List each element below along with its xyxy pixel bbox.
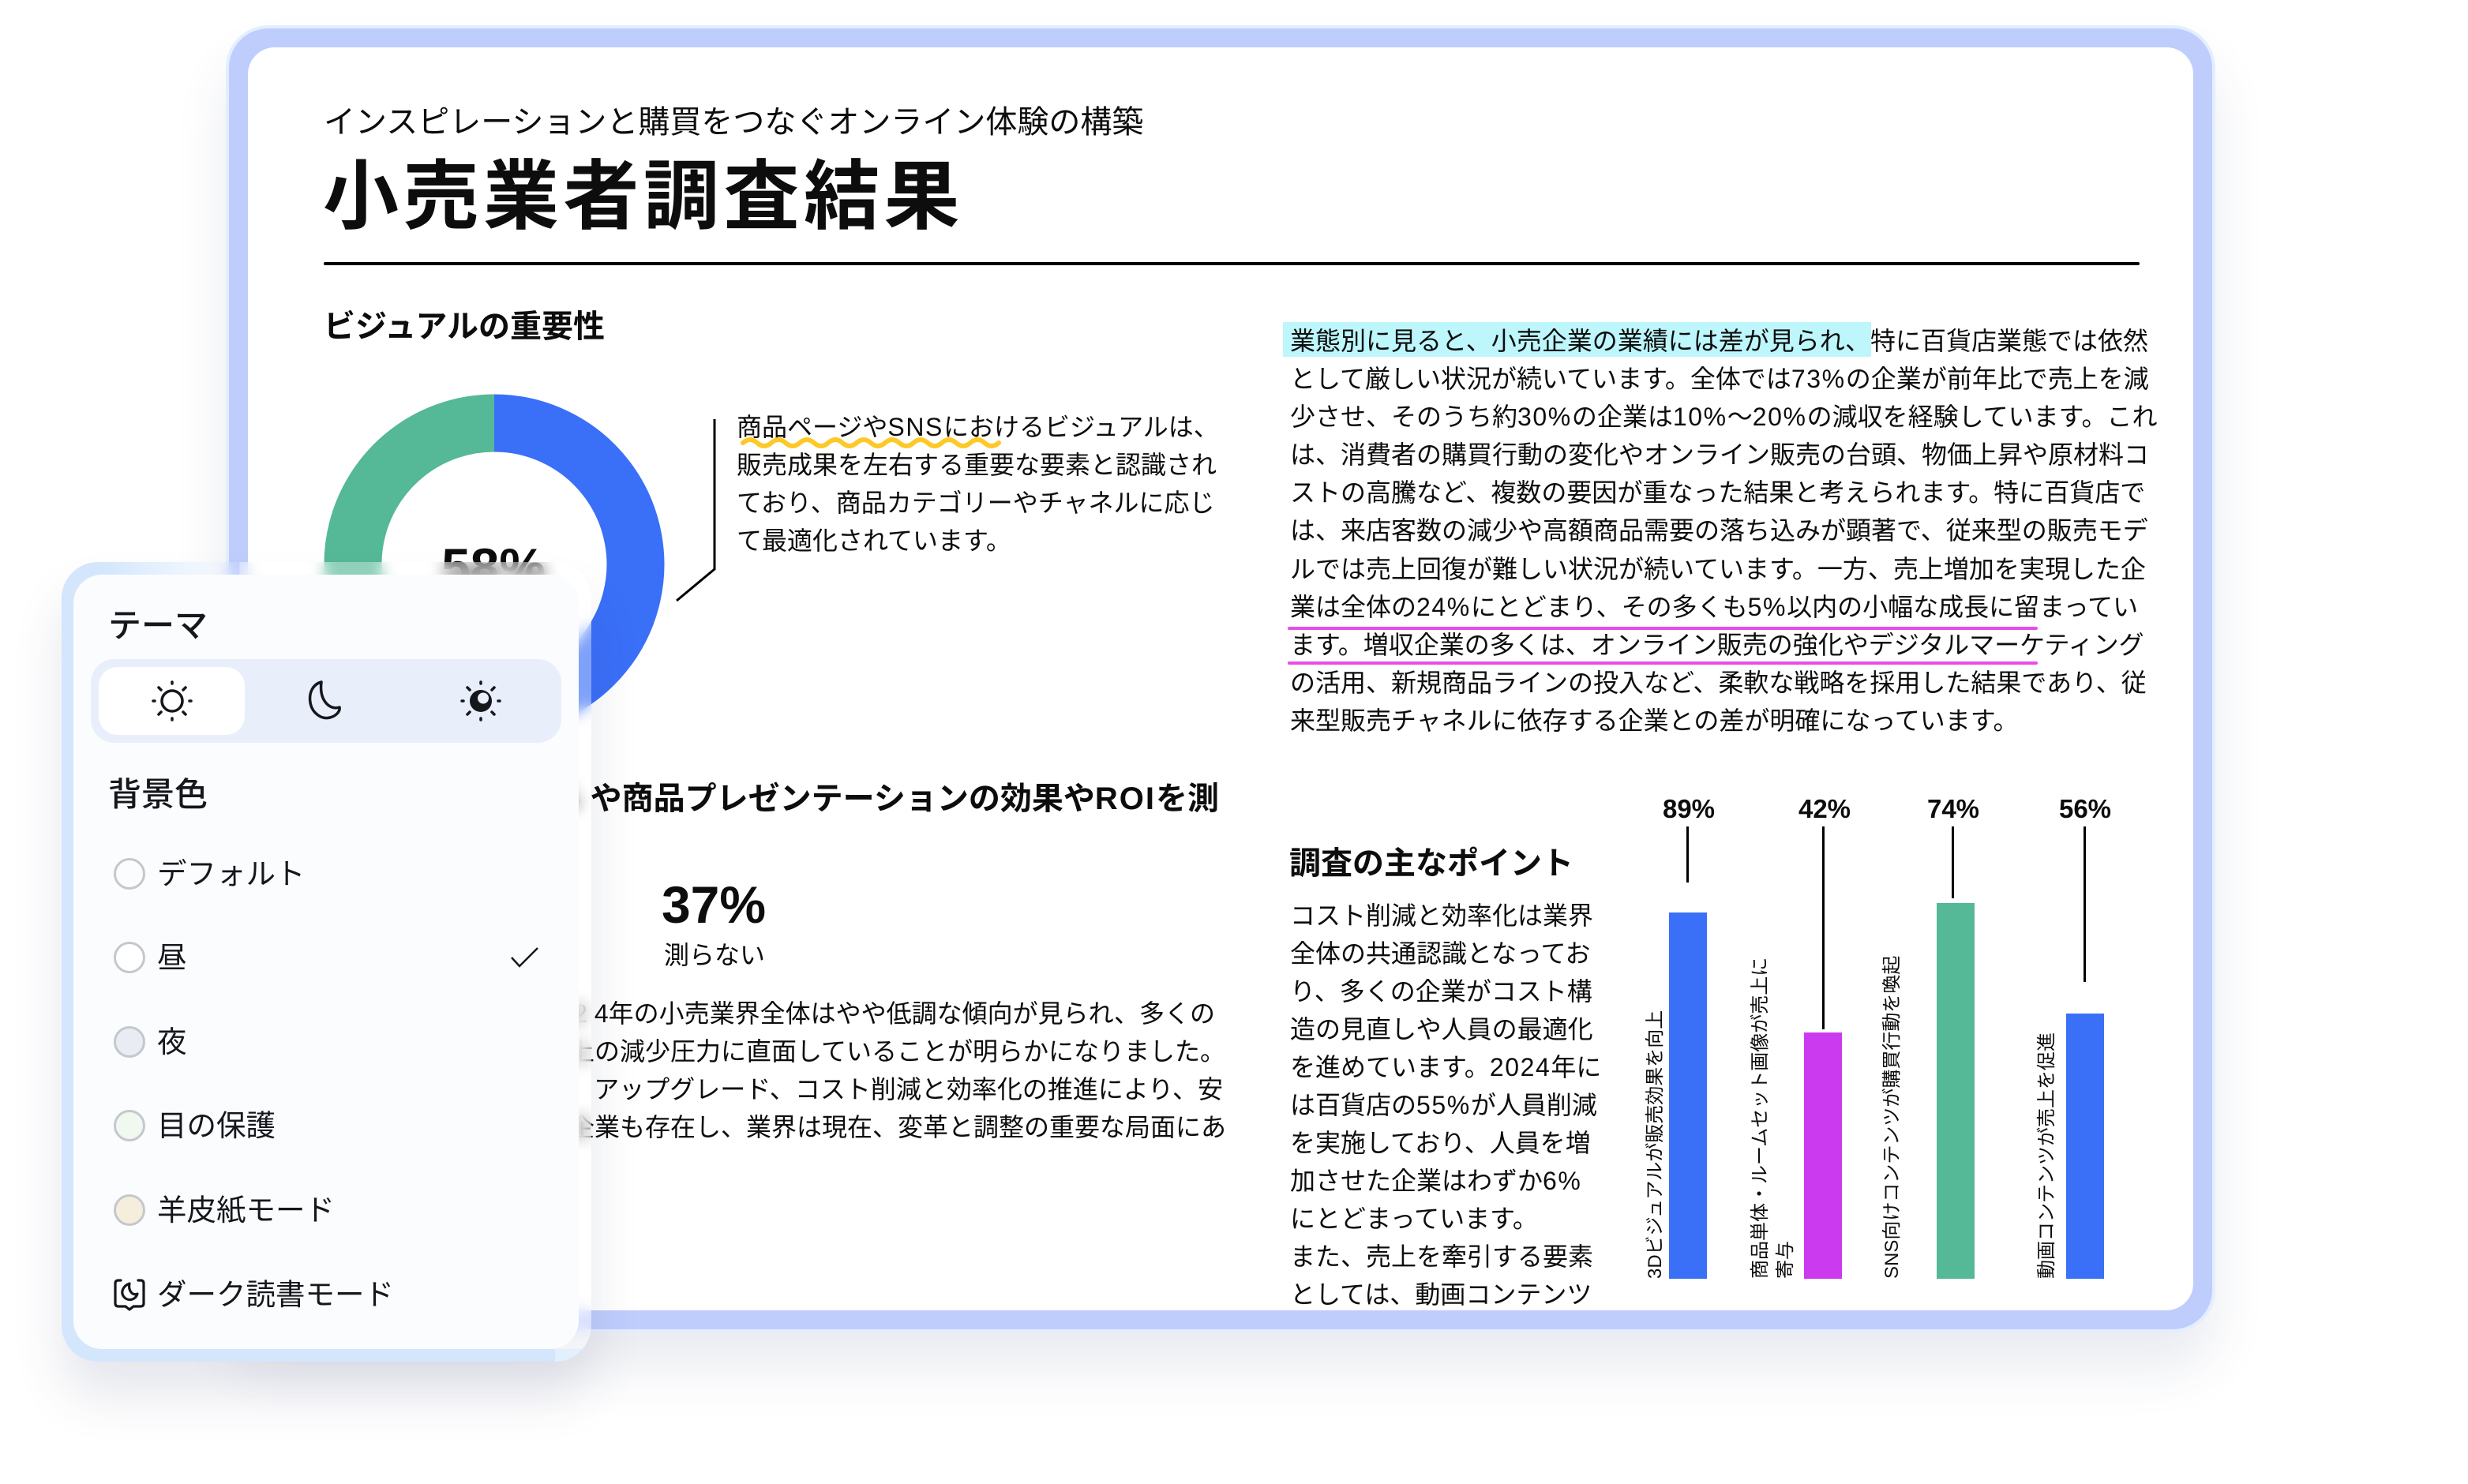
bar: video content [2036,794,2111,1279]
paragraph: results by format: は、消費者の購買行動の変化やオンライン販売の台頭、物価上昇や原材料コ [1290,440,2149,469]
panel: report frame [229,28,2212,1329]
bar: SNS content: SNS向けコンテンツが購買行動を喚起 [1881,956,1903,1279]
option: day [114,941,538,1298]
stat: 37%: 37% [662,875,766,934]
text highlight [1283,322,1871,357]
theme segmented control [91,659,561,743]
paragraph: results by format: は、来店客数の減少や高額商品需要の落ち込みが顕著で、従来型の販売モデ [1290,516,2148,545]
paragraph: results by format: 業態別に見ると、小売企業の業績には差が見られ、特に百貨店業態では依然 [1290,327,2148,355]
option: night [114,1025,186,1059]
icon: check [511,947,538,968]
bar: video content: 56% [2059,794,2111,823]
title: 小売業者調査結果 [323,155,964,239]
paragraph: market overview: 202 4年の小売業界全体はやや低調な傾向が見られ、多くの [545,999,1215,1028]
callout text [737,413,1219,555]
subtitle: インスピレーションと購買をつなぐオンライン体験の構築 [324,105,1143,140]
icon: sun [152,680,193,721]
donut chart [314,395,665,724]
callout text: て最適化されています。 [737,527,1011,555]
stat label: 測らない [664,941,765,969]
paragraph: results by format [1290,327,2157,735]
option: dark reading mode: ダーク読書モード [157,1278,394,1311]
panel interior [73,575,579,1349]
paragraph: key points: また、売上を牽引する要素 [1290,1242,1593,1271]
bar: single product and room sets: 42% [1798,794,1851,823]
paragraph: results by format: 少させ、そのうち約30%の企業は10%～20%の減収を経験しています。これ [1290,403,2157,431]
pink underline 2 [1288,661,2038,665]
callout text: 商品ページやSNSにおけるビジュアルは、 [737,413,1219,441]
paragraph: key points: 全体の共通認識となってお [1290,939,1590,968]
header rule [324,262,2140,265]
callout text: 販売成果を左右する重要な要素と認識され [737,451,1217,479]
bar: SNS content [1881,794,1979,1279]
bar: 3D visuals: 89% [1663,794,1715,823]
paragraph: key points: コスト削減と効率化は業界 [1290,901,1593,930]
paragraph: market overview: 売上の減少圧力に直面していることが明らかになりました。 [544,1037,1225,1066]
selected segment [99,667,245,735]
icon: moon [308,680,341,720]
paragraph: results by format: の活用、新規商品ラインの投入など、柔軟な戦略を採用した結果であり、従 [1290,669,2147,697]
paragraph: results by format: ます。増収企業の多くは、オンライン販売の強化やデジタルマーケティング [1290,631,2144,659]
icon: dark reading [114,1279,145,1311]
bar: 3D visuals: 3Dビジュアルが販売効果を向上 [1645,1010,1666,1279]
paragraph: key points: 加させた企業はわずか6% [1290,1167,1581,1195]
bar: single product and room sets: 商品単体・ルームセット画像が売上に [1750,957,1771,1279]
paragraph: results by format: ルでは売上回復が難しい状況が続いています。一方、売上増加を実現した企 [1290,555,2146,583]
bar: single product and room sets: 寄与 [1775,1241,1796,1279]
paragraph: market overview: アップグレード、コスト削減と効率化の推進により、安 [594,1075,1223,1104]
paragraph: market overview [493,998,1226,1146]
paragraph: key points: を進めています。2024年に [1290,1053,1601,1081]
paragraph: key points: を実施しており、人員を増 [1290,1129,1591,1157]
paragraph: results by format: 業は全体の24%にとどまり、その多くも5%以内の小幅な成長に留まってい [1290,593,2138,621]
paragraph: key points: り、多くの企業がコスト構 [1290,977,1592,1006]
pink underline 1 [1288,627,2038,630]
callout text: ており、商品カテゴリーやチャネルに応じ [737,489,1214,517]
paragraph: key points: としては、動画コンテンツ [1290,1280,1592,1309]
bar: video content: 動画コンテンツが売上を促進 [2036,1032,2057,1279]
panel: report page [248,47,2193,1310]
left tint of the panel border [62,598,73,1325]
wavy highlight [741,437,1001,448]
heading: visual importance: ビジュアルの重要性 [324,309,605,344]
bar: 3D visuals [1645,794,1715,1279]
donut chart: 58% [441,538,546,596]
theme heading: テーマ [108,607,208,644]
paragraph: key points [1290,901,1601,1309]
paragraph: market overview: 定した企業も存在し、業界は現在、変革と調整の重要な局面にあ [493,1113,1226,1141]
option: default: デフォルト [157,857,305,890]
panel: theme settings [62,562,591,1362]
bar chart [1645,794,2111,1279]
option: day: 昼 [157,941,186,974]
paragraph: key points: にとどまっています。 [1290,1205,1538,1233]
background colour heading: 背景色 [108,776,208,813]
callout connector [676,419,715,601]
paragraph: results by format: として厳しい状況が続いています。全体では73%の企業が前年比で売上を減 [1290,365,2149,393]
bottom tint of the panel border [98,1349,555,1362]
bar: single product and room sets [1750,794,1851,1279]
paragraph: key points: は百貨店の55%が人員削減 [1290,1091,1597,1119]
option: parchment: 羊皮紙モード [157,1194,335,1227]
paragraph: results by format: ストの高騰など、複数の要因が重なった結果と考えられます。特に百貨店で [1290,478,2145,507]
heading: measurement of ROI: ビジュアルや商品プレゼンテーションの効果やROIを測 [428,781,1219,816]
paragraph: key points: 造の見直しや人員の最適化 [1290,1015,1593,1044]
icon: half sun [460,680,501,721]
option: night: 夜 [157,1025,186,1059]
heading: key points: 調査の主なポイント [1289,846,1573,881]
bar: SNS content: 74% [1927,794,1979,823]
paragraph: results by format: 来型販売チャネルに依存する企業との差が明確になっています。 [1290,706,2019,735]
option: eye protection: 目の保護 [157,1109,276,1142]
